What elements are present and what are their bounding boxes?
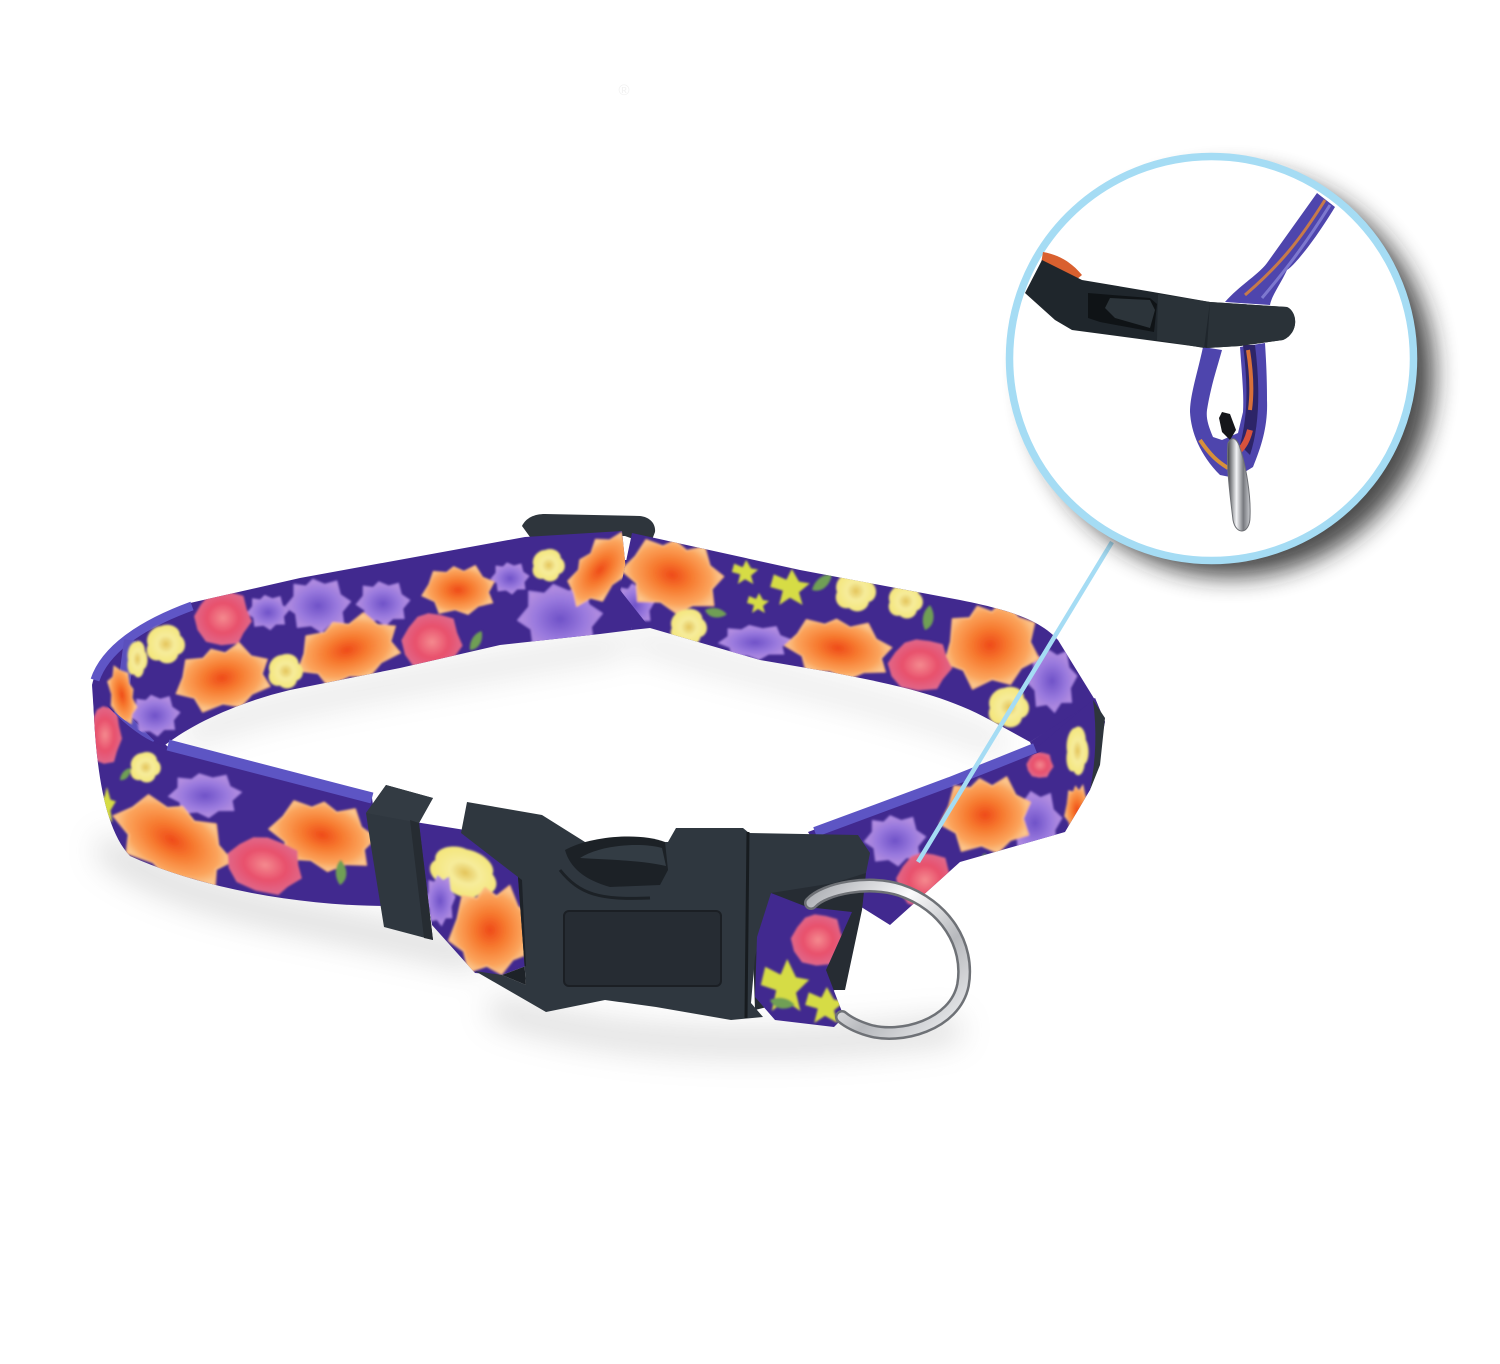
detail D-ring [1219, 412, 1250, 531]
buckle window shadow [502, 877, 526, 985]
slider keeper [366, 785, 433, 940]
strap loop around D-ring [755, 893, 852, 1027]
collar band: front left [88, 690, 388, 906]
callout leader line [918, 542, 1112, 862]
collar band: upper right [614, 528, 1095, 742]
floral print: front left [88, 706, 381, 902]
floral print: upper right [614, 528, 1077, 727]
floral print: upper left [104, 523, 645, 736]
right side keeper [1090, 700, 1105, 790]
floral print: front right [865, 726, 1090, 907]
detail strap: upper strand [1225, 193, 1335, 305]
floral print: centre strap [427, 844, 524, 975]
collar back clip [522, 514, 655, 545]
detail buckle [1025, 260, 1295, 348]
D-ring [811, 886, 964, 1033]
ground shadow under collar [110, 640, 1000, 1043]
detail strap: lower loop [1190, 343, 1267, 478]
infographic canvas [90, 84, 1454, 1067]
side release buckle [461, 802, 870, 1020]
buckle rear arm behind D-ring loop [751, 873, 866, 1010]
collar band: upper left [92, 523, 645, 745]
registered mark: ® [618, 82, 630, 99]
buckle nameplate recess [564, 911, 721, 986]
fold fills at band junctions [92, 560, 1105, 770]
floral print: loop [761, 914, 845, 1023]
collar band: front right [808, 698, 1105, 925]
band section between slider and buckle [415, 822, 531, 975]
buckle latch [565, 836, 668, 887]
detail strap: end behind buckle [1041, 252, 1082, 278]
callout lens [1010, 156, 1414, 560]
callout lens shadow [1028, 171, 1434, 577]
